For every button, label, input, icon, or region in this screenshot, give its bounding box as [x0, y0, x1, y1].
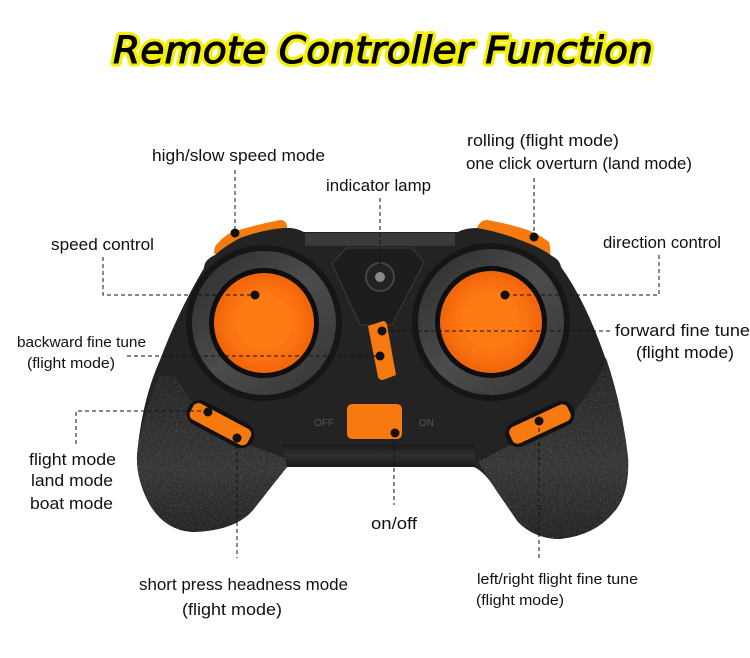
- title: Remote Controller Function: [113, 29, 653, 72]
- label: backward flight mode: (flight mode): [27, 355, 115, 372]
- label: rolling: rolling (flight mode): [467, 132, 619, 150]
- label: backward fine tune: backward fine tune: [17, 334, 146, 351]
- left grip texture: [137, 375, 287, 532]
- bottom bar: [282, 444, 475, 467]
- label: speed control: speed control: [51, 236, 154, 254]
- label: indicator lamp: indicator lamp: [326, 177, 431, 195]
- title: Remote Controller Function: [113, 29, 653, 72]
- off label: OFF: [314, 418, 334, 429]
- on label: ON: [419, 418, 434, 429]
- centre panel: [332, 248, 424, 325]
- label: high/slow speed mode: high/slow speed mode: [152, 147, 325, 165]
- label: forward fine tune: forward fine tune: [615, 322, 750, 340]
- label: one click overturn: one click overturn (land mode): [466, 155, 692, 173]
- power switch: [347, 404, 402, 439]
- label: short press headness mode: short press headness mode: [139, 576, 348, 594]
- label: forward flight mode: (flight mode): [636, 344, 734, 362]
- right grip texture: [478, 358, 628, 539]
- right shoulder button: [477, 220, 550, 256]
- label: on/off: on/off: [371, 515, 417, 533]
- callout lines: [76, 170, 659, 558]
- trim slider right: [501, 397, 579, 451]
- label: direction control: direction control: [603, 234, 721, 252]
- indicator lamp: [366, 263, 394, 291]
- label: short press flight mode: (flight mode): [182, 601, 282, 619]
- callout dots: [204, 228, 544, 442]
- right joystick: [412, 243, 570, 401]
- top highlight band: [305, 233, 455, 246]
- fine tune button: [368, 321, 396, 380]
- label: left/right flight mode: (flight mode): [476, 592, 564, 609]
- label: boat mode: boat mode: [30, 495, 113, 513]
- label: left/right flight fine tune: left/right flight fine tune: [477, 571, 638, 588]
- left shoulder button: [214, 220, 287, 256]
- controller body: [137, 228, 628, 539]
- mode slider left: [182, 396, 259, 453]
- controller: [137, 220, 628, 539]
- left joystick: [186, 245, 342, 401]
- label: land mode: land mode: [31, 472, 113, 490]
- label: flight mode: flight mode: [29, 451, 116, 469]
